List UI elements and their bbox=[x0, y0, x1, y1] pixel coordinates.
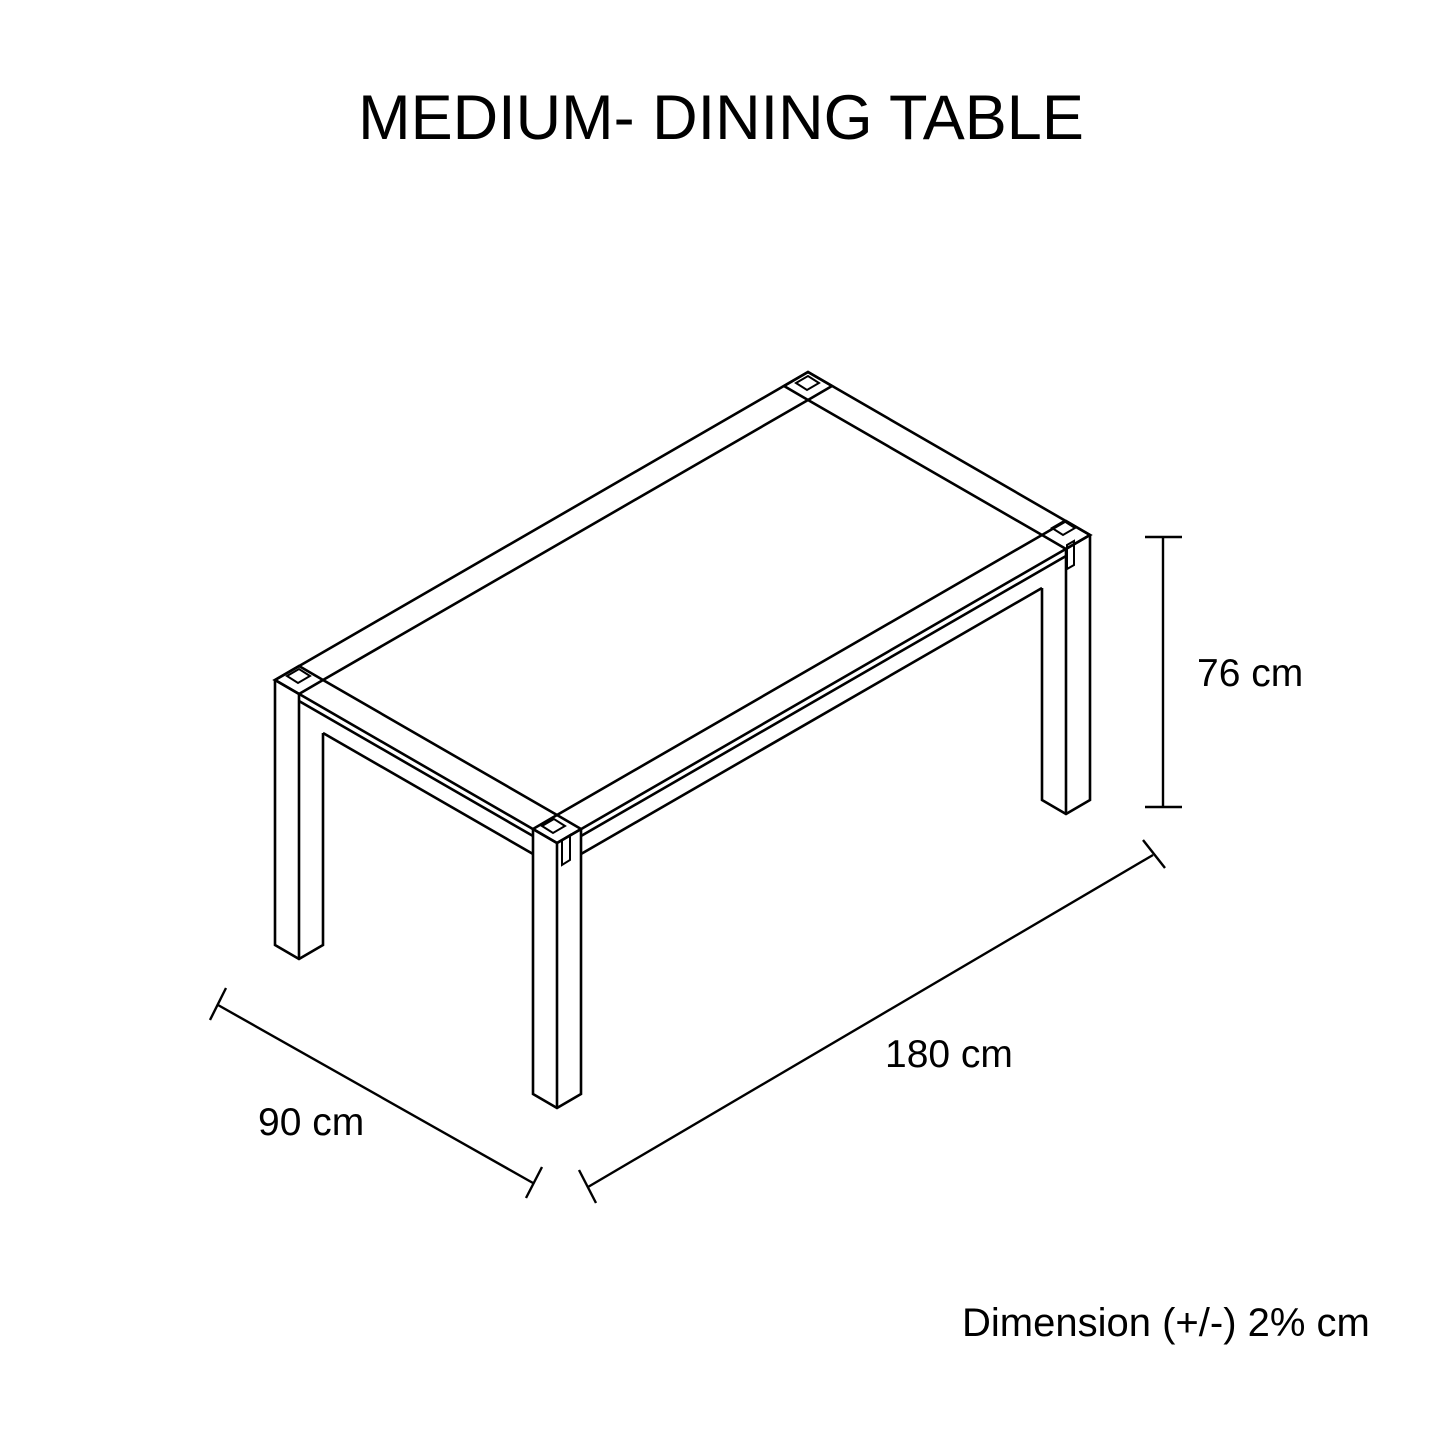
table drawing bbox=[275, 372, 1090, 1108]
dimension: length 180 cm bbox=[579, 840, 1165, 1203]
label: 76 cm: 76 cm bbox=[1197, 652, 1303, 695]
footer note: Dimension (+/-) 2% cm bbox=[962, 1301, 1370, 1345]
corner block: left bbox=[275, 666, 323, 694]
title: MEDIUM- DINING TABLE bbox=[358, 83, 1084, 153]
right leg bbox=[1042, 535, 1090, 814]
label: 90 cm: 90 cm bbox=[258, 1101, 364, 1144]
table top outer outline bbox=[275, 372, 1090, 843]
corner block: back bbox=[784, 372, 832, 400]
front apron bbox=[581, 556, 1066, 854]
dimension: depth 90 cm bbox=[210, 988, 542, 1198]
left apron bbox=[299, 701, 533, 854]
corner block: front bbox=[533, 815, 581, 843]
dimension: height 76 cm bbox=[1145, 537, 1182, 807]
left leg bbox=[275, 680, 323, 959]
label: 180 cm: 180 cm bbox=[885, 1033, 1013, 1076]
corner block: right bbox=[1042, 521, 1090, 549]
front leg bbox=[533, 829, 581, 1108]
table top inner panel bbox=[323, 400, 1042, 815]
notches bbox=[287, 376, 1075, 865]
